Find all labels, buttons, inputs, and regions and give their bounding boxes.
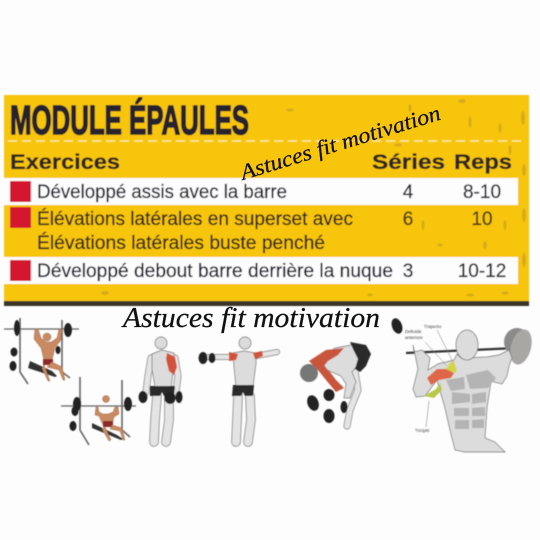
figure: anatomy of shoulder press — [390, 317, 535, 452]
row 3: Développé debout barre derrière la nuque — [37, 260, 393, 282]
labels: Trapezio — [424, 324, 442, 329]
row 3 — [4, 257, 518, 284]
watermark: horizontal handwriting: Astuces fit motivation — [121, 303, 380, 334]
row 1: 8-10 — [463, 182, 501, 203]
figure: anatomy of shoulder press: anteriore — [405, 335, 423, 340]
figure: standing man with dumbbells — [138, 337, 182, 442]
row 1: 4 — [403, 182, 414, 203]
row 1 — [4, 178, 518, 205]
row 2: 6 — [403, 209, 413, 230]
panel texture: speckles — [101, 99, 526, 296]
table header: reps: Reps — [454, 151, 512, 174]
row 3: 10-12 — [458, 261, 506, 282]
panel: yellow exercise table — [4, 95, 529, 306]
row 1: Développé assis avec la barre — [37, 181, 287, 203]
figure: seated press 1 — [4, 318, 79, 384]
icon: dumbbell plate — [390, 317, 404, 335]
dashed divider — [8, 140, 525, 142]
row 2: Élévations latérales en superset avec — [37, 207, 353, 230]
row 2 — [10, 207, 493, 254]
row 2: 10 — [471, 209, 493, 230]
figure: seated press 2 — [61, 377, 136, 445]
table header: séries: Séries — [372, 151, 445, 174]
title: MODULE ÉPAULES — [10, 97, 249, 143]
figure: man with lateral raise — [198, 337, 277, 442]
figure: bent-over lateral raise — [300, 342, 371, 426]
dark bottom strip — [4, 301, 529, 306]
table header: exercices: Exercices — [10, 151, 120, 174]
row 2: Élévations latérales buste penché — [37, 231, 325, 254]
row 3: 3 — [403, 261, 413, 282]
figure: anatomy of shoulder press: Tricipiti — [415, 428, 429, 433]
barbell — [406, 327, 535, 367]
watermark: diagonal handwriting: Astuces fit motivation — [235, 100, 443, 185]
figure: anatomy of shoulder press: Deltoide — [405, 329, 422, 334]
